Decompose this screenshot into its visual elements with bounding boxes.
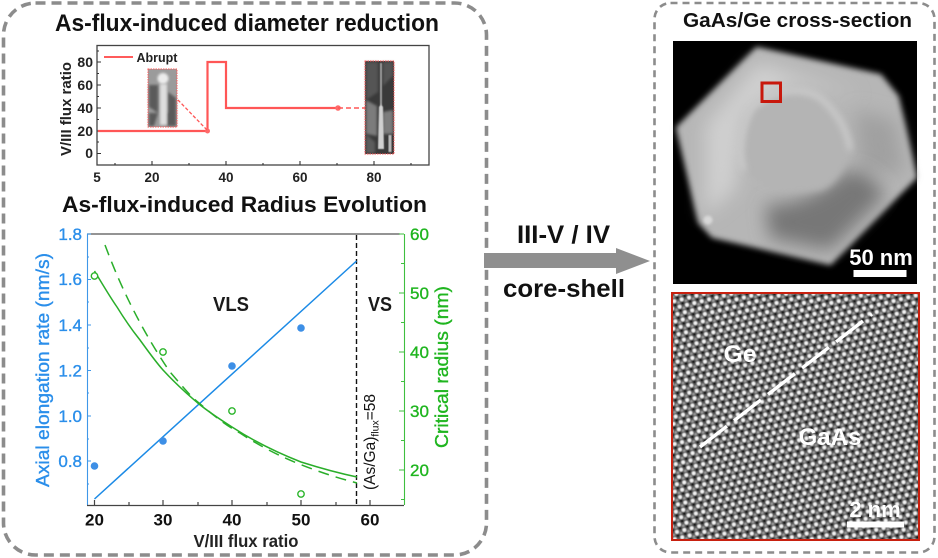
y axis tick labels: 40: [77, 100, 93, 116]
heading: radius evolution: As-flux-induced Radius Evolution: [62, 192, 427, 217]
core ring highlight: [741, 91, 850, 170]
y axis tick labels: [77, 54, 93, 161]
y axis tick labels: 20: [77, 123, 93, 139]
panel: right dashed frame: [654, 3, 934, 552]
nanowire hexagon: [678, 49, 915, 263]
left tick labels: [58, 225, 82, 471]
bright lower left corner: [704, 216, 712, 224]
callout left: [178, 100, 210, 134]
chart: flux ratio step profile: [59, 46, 429, 185]
x axis tick labels: 20: [144, 170, 160, 185]
x axis tick labels: 60: [292, 170, 308, 185]
x tick labels: 40: [223, 510, 241, 530]
image: STEM cross-section: [673, 41, 917, 284]
y axis tick labels: 0: [85, 145, 93, 161]
core body: [741, 91, 850, 192]
label GaAs: GaAs: [799, 424, 861, 451]
left axis title: Axial elongation rate (nm/s): [33, 253, 53, 487]
x axis title: V/III flux ratio: [194, 531, 298, 551]
dark shell region: [765, 171, 885, 250]
x axis tick labels: 80: [366, 170, 382, 185]
chart: elongation rate and critical radius: [33, 225, 452, 551]
x tick labels: [85, 510, 379, 530]
left tick labels: 1.2: [58, 362, 82, 380]
region label VLS: VLS: [213, 294, 249, 316]
right tick labels: 40: [410, 343, 429, 362]
blue fit line: [94, 261, 356, 499]
scale label: 2 nm: [849, 497, 901, 522]
threshold label: =58: [362, 394, 379, 420]
x axis tick labels: 40: [218, 170, 234, 185]
x tick labels: 60: [361, 510, 379, 530]
axis ticks: [97, 51, 411, 165]
right shell shading: [855, 110, 905, 175]
threshold label: flux: [370, 420, 382, 437]
bottom axis: [87, 500, 404, 506]
left tick labels: 1.8: [58, 225, 82, 244]
y axis tick labels: 60: [77, 77, 93, 93]
left tick labels: 1.0: [58, 407, 82, 426]
threshold line: [356, 235, 358, 505]
scale label: 50 nm: [849, 245, 913, 270]
label Ge: Ge: [724, 341, 756, 368]
top axis: [87, 233, 400, 235]
blue data points: [91, 324, 305, 470]
left tick labels: 0.8: [58, 452, 82, 471]
left axis: [87, 234, 91, 505]
x tick labels: 20: [85, 510, 104, 530]
y axis title: V/III flux ratio: [59, 62, 75, 156]
right tick labels: 20: [410, 461, 429, 480]
right tick labels: 60: [410, 225, 429, 244]
legend: [104, 51, 178, 65]
scale bar: [847, 522, 904, 528]
right axis: [399, 234, 404, 505]
green data points: [91, 273, 304, 497]
panel: left dashed frame: [4, 3, 486, 555]
interface dashed line: [700, 314, 872, 447]
x axis tick labels: 5: [93, 170, 101, 185]
plot frame: [97, 46, 429, 165]
left tick labels: 1.4: [58, 316, 82, 335]
threshold label: (As/Ga): [362, 437, 379, 490]
green solid fit: [94, 271, 357, 477]
right tick labels: 50: [410, 284, 429, 303]
inset: SEM nanowire 2: [365, 61, 394, 154]
heading: diameter reduction: As-flux-induced diameter reduction: [55, 10, 439, 37]
x axis tick labels: [93, 170, 382, 185]
label: III-V / IV: III-V / IV: [517, 221, 610, 249]
bright upper shell band: [705, 62, 860, 215]
label: core-shell: core-shell: [503, 275, 625, 303]
right tick labels: 30: [410, 402, 429, 421]
scale bar: [854, 270, 906, 277]
heading: cross-section: GaAs/Ge cross-section: [683, 10, 912, 32]
x tick labels: 50: [292, 510, 310, 530]
y axis tick labels: 80: [77, 54, 93, 70]
arrow: III-V / IV core-shell: [484, 248, 650, 274]
inset: SEM nanowire 1: [148, 69, 177, 127]
legend: Abrupt: [136, 51, 178, 65]
flux step line: [98, 62, 338, 131]
image: HRTEM lattice: [672, 293, 919, 540]
x tick labels: 30: [154, 510, 172, 530]
right axis title: Critical radius (nm): [432, 286, 452, 448]
green dashed fit: [105, 245, 357, 483]
left tick labels: 1.6: [58, 270, 82, 289]
right tick labels: [410, 225, 429, 480]
region label VS: VS: [368, 294, 392, 316]
selected region marker: [762, 83, 780, 102]
callout right: [335, 105, 365, 111]
